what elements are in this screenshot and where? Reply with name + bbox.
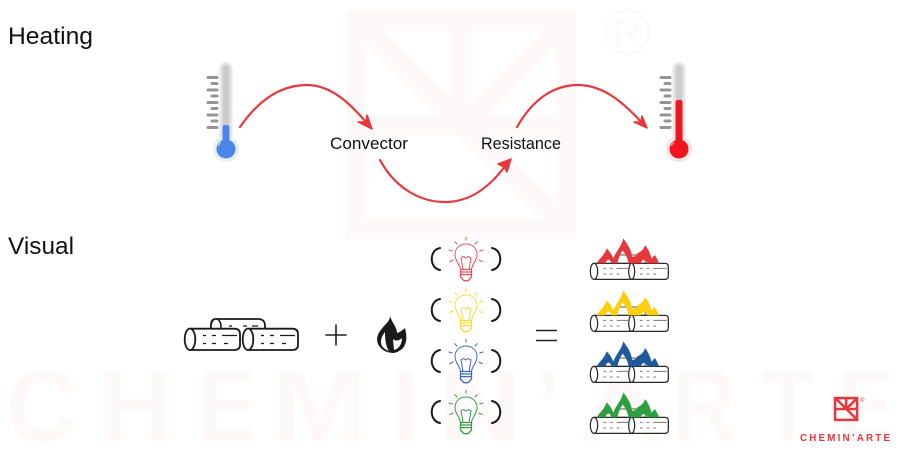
heading: Visual: Visual (8, 233, 74, 260)
arrow: resistance to thermometer (517, 85, 647, 128)
symbol: plus (326, 324, 346, 346)
watermark: registered sign (605, 10, 649, 55)
coloured fires on logs (590, 238, 668, 433)
brand logo (800, 397, 890, 444)
fire: red (590, 238, 668, 279)
watermark: registered sign: R (613, 13, 641, 55)
heading: Heating: Heating (8, 23, 93, 50)
logo mark (835, 397, 857, 420)
arrow: thermometer to convector (240, 85, 372, 129)
fire: green (590, 392, 668, 433)
option: blue bulb (432, 339, 500, 383)
icon: cold thermometer (208, 62, 239, 162)
fire: yellow (590, 290, 668, 331)
logo wordmark: CHEMIN’ARTE (800, 433, 890, 444)
label: Resistance: Resistance (481, 135, 561, 153)
arrow: convector to resistance (380, 159, 511, 202)
logo registered sign: ® (860, 397, 865, 404)
symbol: equals (536, 330, 557, 340)
icon: black flame (377, 316, 406, 353)
icon: logs (185, 319, 298, 350)
watermark: brand name (6, 351, 894, 451)
watermark: logo mark (356, 11, 566, 229)
option: yellow bulb (432, 288, 500, 332)
label: Convector: Convector (330, 135, 409, 153)
option: red bulb (432, 237, 500, 281)
fire: blue (590, 341, 668, 382)
bulb options: four colours in brackets (432, 237, 500, 434)
icon: hot thermometer (661, 62, 692, 162)
option: green bulb (432, 390, 500, 434)
